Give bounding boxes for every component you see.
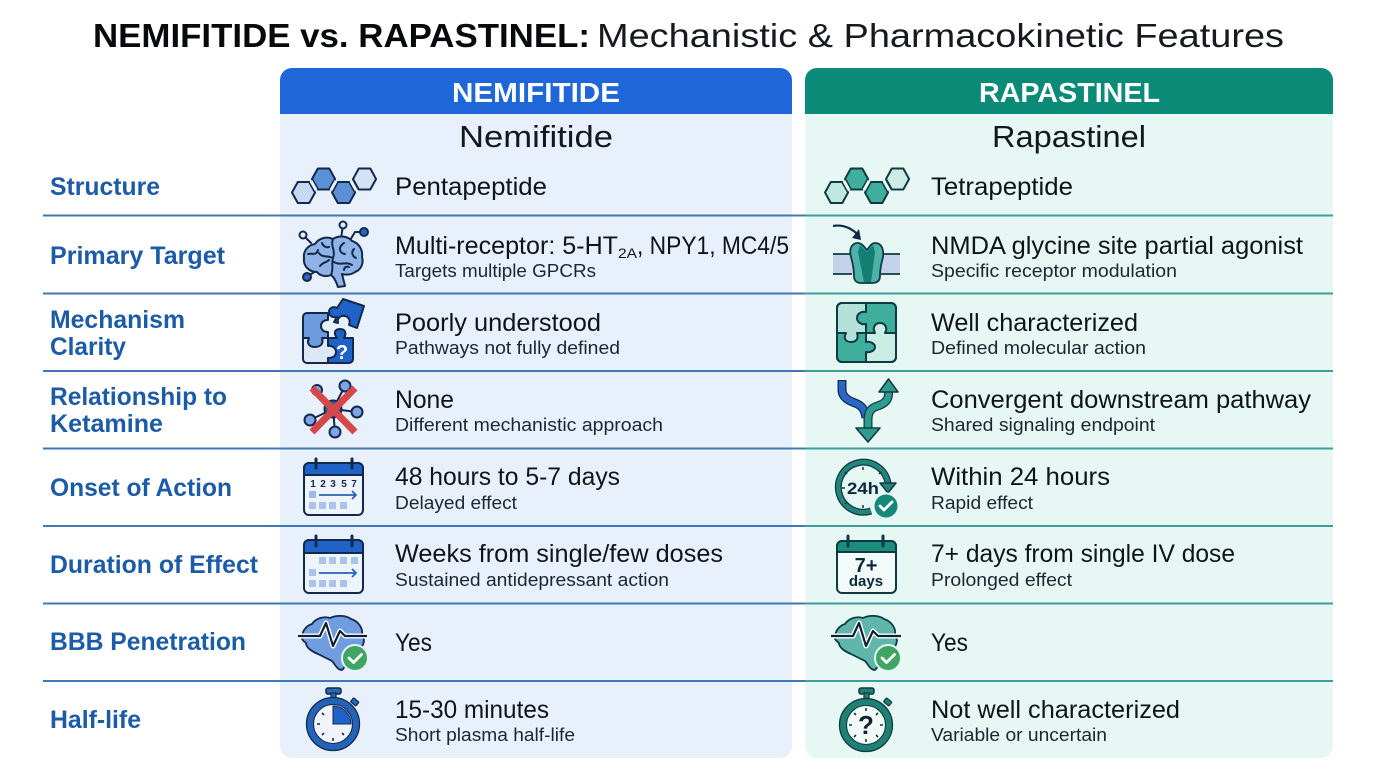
nemifitide structure text: Pentapeptide bbox=[395, 173, 547, 201]
rapastinel mechanism text: Defined molecular action bbox=[931, 337, 1146, 358]
nemifitide half-life text: 15-30 minutes bbox=[395, 696, 549, 724]
rapastinel duration text: Prolonged effect bbox=[931, 569, 1072, 590]
nemifitide target text: , NPY1, MC4/5 bbox=[637, 232, 789, 260]
icon: NMDA receptor channel bbox=[833, 226, 900, 283]
icon: nemifitide puzzle with question mark: ? bbox=[336, 342, 348, 364]
row label: Mechanism Clarity bbox=[50, 306, 185, 361]
rapastinel half-life text: Not well characterized bbox=[931, 696, 1180, 724]
rapastinel header: RAPASTINEL bbox=[979, 77, 1160, 108]
row label: Duration of Effect: Duration of Effect bbox=[50, 551, 259, 579]
nemifitide duration text: Weeks from single/few doses bbox=[395, 540, 723, 568]
nemifitide ketamine text: None bbox=[395, 386, 454, 414]
icon: rapastinel peptide chain bbox=[825, 168, 909, 203]
icon: rapastinel stopwatch with question mark: ? bbox=[858, 710, 874, 740]
icon: 7+ days calendar: days bbox=[849, 573, 883, 590]
row label: Relationship to Ketamine bbox=[50, 383, 227, 438]
nemifitide half-life text: Short plasma half-life bbox=[395, 724, 575, 745]
nemifitide header: NEMIFITIDE bbox=[452, 77, 620, 108]
icon: rapastinel brain pulse with check bbox=[831, 616, 901, 671]
rapastinel header bbox=[805, 68, 1333, 114]
icon: 24h clock with check bbox=[838, 462, 898, 518]
nemifitide duration text: Sustained antidepressant action bbox=[395, 569, 669, 590]
icon: convergent pathway arrows bbox=[842, 379, 898, 442]
nemifitide onset text: Delayed effect bbox=[395, 492, 517, 513]
row label: Relationship to Ketamine: Relationship to bbox=[50, 383, 227, 411]
icon: onset calendar: 1 bbox=[310, 479, 316, 490]
nemifitide mechanism text: Pathways not fully defined bbox=[395, 337, 620, 358]
icon: onset calendar: 5 bbox=[341, 479, 347, 490]
nemifitide subheading: Nemifitide bbox=[459, 119, 613, 154]
rapastinel structure text: Tetrapeptide bbox=[931, 173, 1073, 201]
icon: duration calendar bbox=[304, 536, 363, 593]
rapastinel ketamine text: Convergent downstream pathway bbox=[931, 386, 1311, 414]
rapastinel onset text: Rapid effect bbox=[931, 492, 1033, 513]
row label: Relationship to Ketamine: Ketamine bbox=[50, 410, 163, 438]
rapastinel mechanism text bbox=[931, 309, 1146, 358]
rapastinel duration text: 7+ days from single IV dose bbox=[931, 540, 1235, 568]
row label: Onset of Action: Onset of Action bbox=[50, 474, 232, 502]
rapastinel duration text bbox=[931, 540, 1235, 590]
icon: onset calendar: 7 bbox=[351, 479, 357, 490]
nemifitide ketamine text bbox=[395, 386, 663, 435]
icon: rapastinel puzzle complete bbox=[837, 303, 896, 362]
nemifitide target text: 2A bbox=[618, 245, 638, 261]
nemifitide BBB text: Yes bbox=[395, 629, 432, 657]
row label: Mechanism Clarity: Mechanism bbox=[50, 306, 185, 334]
icon: rapastinel stopwatch with question mark bbox=[840, 688, 892, 752]
nemifitide target text: Targets multiple GPCRs bbox=[395, 260, 596, 281]
nemifitide mechanism text bbox=[395, 309, 620, 358]
nemifitide onset text bbox=[395, 463, 620, 513]
icon: nemifitide peptide chain bbox=[292, 168, 376, 203]
icon: 7+ days calendar: 7+ bbox=[855, 555, 877, 577]
rapastinel onset text bbox=[931, 463, 1110, 513]
rapastinel target text: NMDA glycine site partial agonist bbox=[931, 232, 1303, 260]
icon: onset calendar: 3 bbox=[330, 479, 336, 490]
rapastinel subheading: Rapastinel bbox=[992, 119, 1146, 154]
nemifitide target text bbox=[395, 232, 789, 281]
rapastinel ketamine text: Shared signaling endpoint bbox=[931, 414, 1155, 435]
icon: nemifitide stopwatch bbox=[306, 688, 360, 750]
panel: rapastinel column background bbox=[805, 114, 1333, 758]
icon: nemifitide brain pulse with check bbox=[298, 616, 368, 671]
icon: nemifitide brain receptors bbox=[300, 222, 368, 287]
nemifitide duration text bbox=[395, 540, 723, 590]
icon: network crossed out bbox=[304, 380, 362, 438]
row label: Half-life: Half-life bbox=[50, 706, 141, 734]
icon: 7+ days calendar bbox=[837, 536, 896, 593]
title: NEMIFITIDE vs. RAPASTINEL: bbox=[93, 17, 590, 54]
rapastinel half-life text: Variable or uncertain bbox=[931, 724, 1107, 745]
rapastinel target text bbox=[931, 232, 1303, 281]
nemifitide half-life text bbox=[395, 696, 575, 745]
icon: onset calendar bbox=[304, 459, 363, 515]
nemifitide mechanism text: Poorly understood bbox=[395, 309, 601, 337]
icon: 24h clock with check: 24h bbox=[847, 479, 879, 498]
nemifitide header bbox=[280, 68, 792, 114]
nemifitide onset text: 48 hours to 5-7 days bbox=[395, 463, 620, 491]
rapastinel BBB text: Yes bbox=[931, 629, 968, 657]
title: Mechanistic & Pharmacokinetic Features bbox=[597, 17, 1284, 54]
rapastinel onset text: Within 24 hours bbox=[931, 463, 1110, 491]
row label: Primary Target: Primary Target bbox=[50, 242, 226, 270]
rapastinel mechanism text: Well characterized bbox=[931, 309, 1138, 337]
rapastinel half-life text bbox=[931, 696, 1180, 745]
nemifitide target text: Multi-receptor: 5-HT bbox=[395, 232, 618, 260]
panel: nemifitide column background bbox=[280, 114, 792, 758]
row label: BBB Penetration: BBB Penetration bbox=[50, 628, 246, 656]
row label: Mechanism Clarity: Clarity bbox=[50, 333, 126, 361]
row label: Structure: Structure bbox=[50, 173, 160, 201]
icon: nemifitide puzzle with question mark bbox=[303, 299, 364, 364]
icon: onset calendar: 2 bbox=[320, 479, 326, 490]
rapastinel ketamine text bbox=[931, 386, 1311, 435]
rapastinel target text: Specific receptor modulation bbox=[931, 260, 1177, 281]
nemifitide ketamine text: Different mechanistic approach bbox=[395, 414, 663, 435]
title bbox=[93, 17, 1284, 54]
